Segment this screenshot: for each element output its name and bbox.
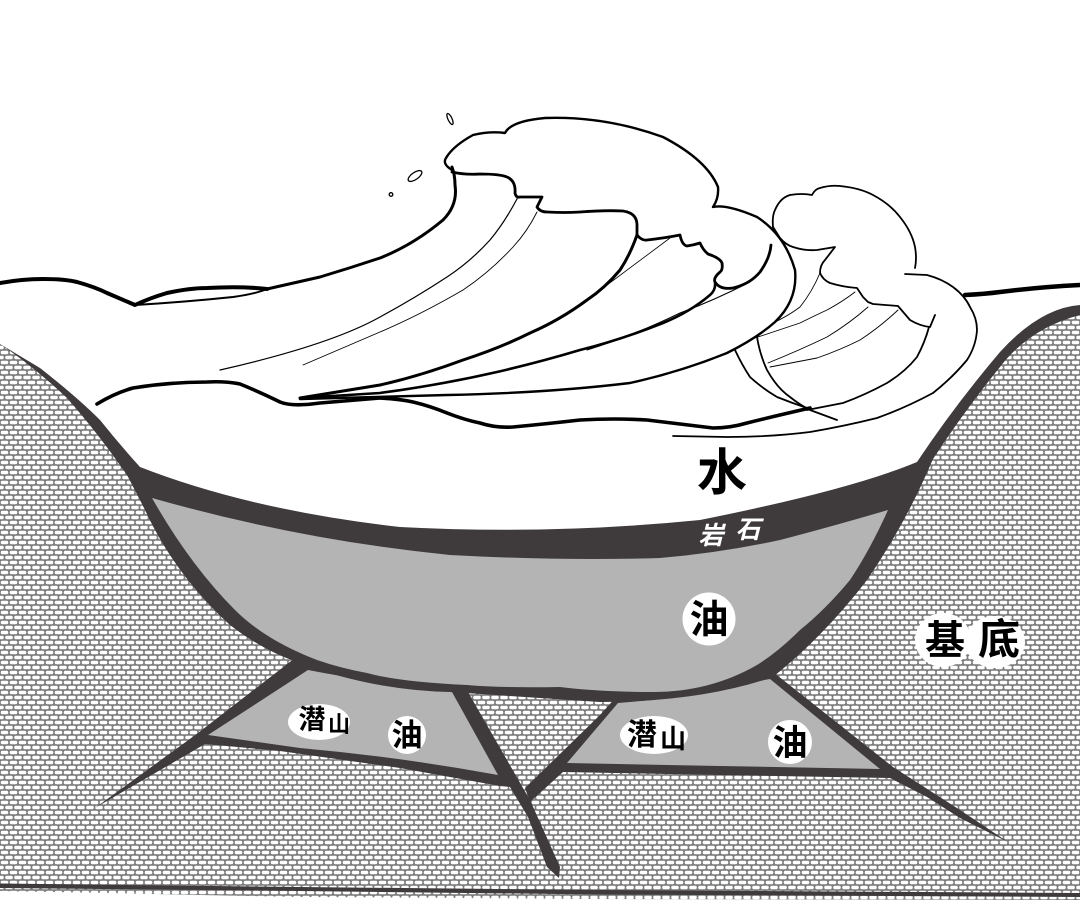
label: water: 水 xyxy=(697,445,747,501)
sea surface lens xyxy=(135,289,267,305)
thin fold line four xyxy=(587,282,750,350)
thin fold line one xyxy=(220,197,518,370)
thin fold line two xyxy=(303,212,537,365)
label: rock xyxy=(698,516,764,550)
spray droplets xyxy=(389,113,454,196)
second wave thin lines xyxy=(757,273,898,367)
main wave front trough xyxy=(97,382,810,428)
label: buried hill left: 山 xyxy=(328,712,350,737)
panel: basement rock texture xyxy=(0,300,1080,900)
sea surface and waves xyxy=(0,113,1080,437)
main crest outline xyxy=(300,118,795,399)
label: oil right: 油 xyxy=(772,724,808,763)
thin fold line three xyxy=(587,238,670,300)
label: oil left: 油 xyxy=(392,718,422,753)
label: buried hill right: 潜 xyxy=(627,719,657,752)
label: basement xyxy=(915,613,1025,668)
left fault outline xyxy=(95,658,560,878)
label: buried hill right xyxy=(620,716,688,754)
second wave arc two xyxy=(735,350,807,408)
label: buried hill left: 潜 xyxy=(298,705,326,735)
panel: main oil reservoir xyxy=(152,498,888,692)
second crest outline xyxy=(773,186,916,268)
second wave body xyxy=(673,274,977,437)
label: basement: 基 xyxy=(925,619,965,663)
inner crest edge xyxy=(452,172,771,288)
label: basement: 底 xyxy=(978,616,1020,663)
label: buried hill left xyxy=(288,704,350,740)
second wave arc one xyxy=(757,337,837,420)
label: oil in main reservoir: 油 xyxy=(689,599,729,642)
label: oil in main reservoir xyxy=(682,592,736,646)
panel: right buried-hill fault block xyxy=(525,672,1008,842)
wave fold two xyxy=(300,235,637,398)
basement bottom line xyxy=(0,884,1080,897)
basin outline xyxy=(0,305,1080,702)
label: rock: 石 xyxy=(735,516,764,544)
panel: water body xyxy=(0,0,1080,530)
right fault outline xyxy=(525,672,1008,842)
right oil pocket xyxy=(567,679,880,769)
sea surface right xyxy=(965,285,1080,295)
wave fold three xyxy=(300,282,715,398)
sea surface left xyxy=(0,279,267,305)
second crest inner edge xyxy=(773,227,935,327)
label: buried hill right: 山 xyxy=(660,724,686,754)
label: rock: 岩 xyxy=(698,522,726,550)
panel: left buried-hill fault block xyxy=(95,658,560,878)
left oil pocket xyxy=(208,670,498,775)
second wave lower fold xyxy=(807,327,929,410)
main wave back xyxy=(267,167,456,289)
